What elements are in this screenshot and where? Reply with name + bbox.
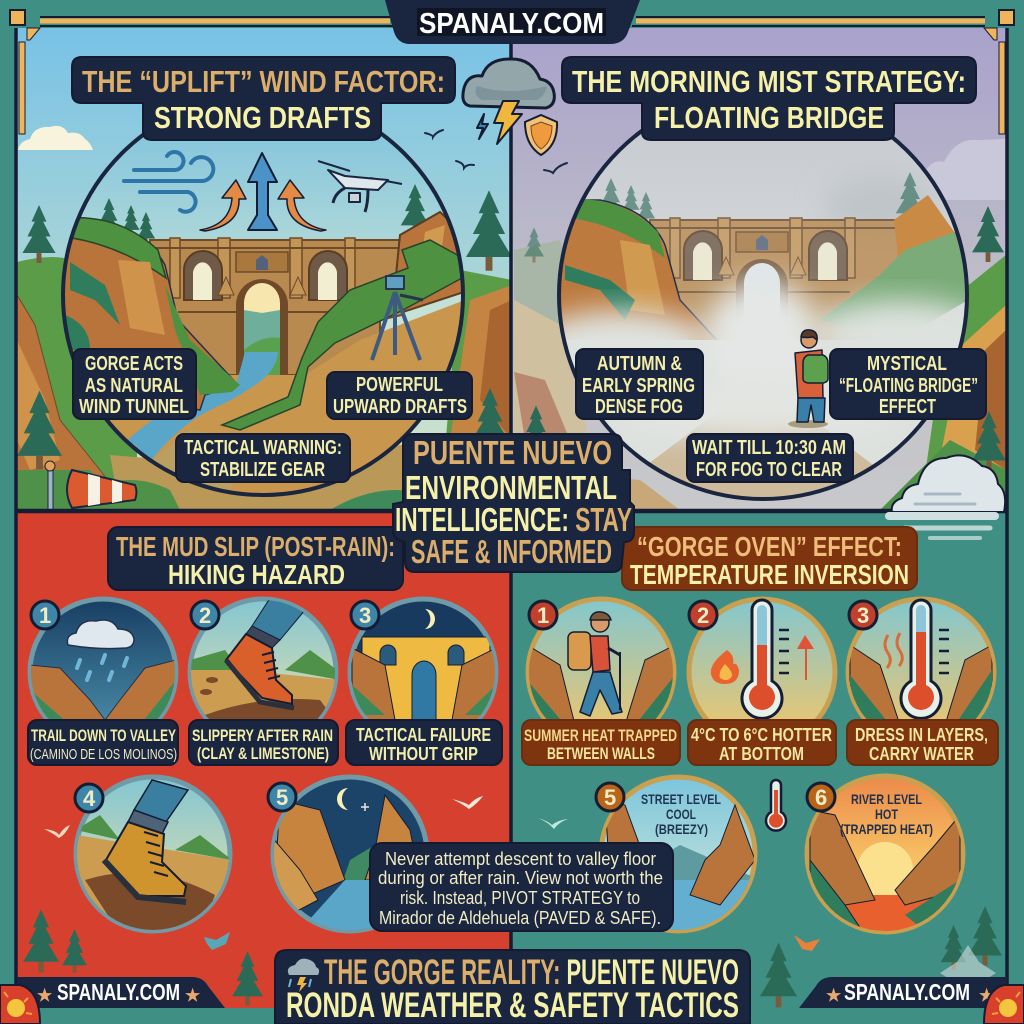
- trees outside circle: [17, 190, 512, 469]
- bottom left badge: site name: ★: [37, 986, 53, 1005]
- central heading: environmental intelligence: PUENTE NUEVO: [413, 434, 612, 471]
- label: wait for fog: WAIT TILL 10:30 AM: [692, 437, 846, 459]
- heading: uplift wind factor: STRONG DRAFTS: [154, 100, 371, 135]
- panel: gorge oven effect: [512, 512, 1006, 1008]
- caption: summer heat: [522, 720, 680, 765]
- panel: uplift wind factor: [18, 28, 510, 509]
- step badges: teal panel: [529, 601, 877, 811]
- icon: small thermometer: [766, 780, 786, 831]
- hills outside circle: [514, 240, 1006, 510]
- icon: sun left corner: [0, 985, 40, 1024]
- caption: trail down to valley: TRAIL DOWN TO VALLEY: [31, 726, 176, 745]
- icon: sun right corner: [984, 985, 1024, 1024]
- bottom right badge: site name: SPANALY.COM: [844, 979, 970, 1005]
- callout: pivot strategy: during or after rain. View not worth the: [378, 868, 663, 888]
- cloud: right sky: [362, 152, 411, 165]
- bottom title bar: THE GORGE REALITY: PUENTE NUEVO: [324, 953, 739, 992]
- icon: storm cloud: [463, 59, 554, 108]
- bottom left badge: site name: [17, 977, 225, 1008]
- caption: tactical failure: TACTICAL FAILURE: [356, 725, 491, 745]
- bird: [544, 163, 567, 173]
- label: gorge wind tunnel: WIND TUNNEL: [79, 396, 189, 418]
- label: autumn fog: EARLY SPRING: [582, 375, 695, 397]
- trees outside circle: [522, 206, 1006, 471]
- label: floating bridge effect: MYSTICAL: [867, 353, 947, 375]
- label: gorge wind tunnel: AS NATURAL: [85, 375, 183, 397]
- icon: small storm cloud: [288, 959, 319, 992]
- label: wait for fog: [687, 434, 853, 482]
- step badges: red panel: 4: [83, 786, 96, 811]
- step badges: teal panel: 3: [857, 603, 869, 628]
- central heading: environmental intelligence: [393, 434, 634, 572]
- caption: tactical failure: WITHOUT GRIP: [369, 744, 478, 764]
- caption: hotter at bottom: [688, 720, 836, 765]
- panel: mud slip hazard: [17, 512, 512, 1008]
- cloud: right haze: [926, 138, 1006, 200]
- heading: mud slip: [108, 527, 403, 590]
- label: tactical warning: TACTICAL WARNING:: [184, 437, 342, 459]
- bottom left badge: site name: SPANALY.COM: [57, 979, 180, 1005]
- big circle scene: fog and bridge: [557, 129, 969, 501]
- callout: pivot strategy: Never attempt descent to valley floor: [385, 849, 656, 869]
- caption: summer heat: BETWEEN WALLS: [547, 744, 655, 763]
- step 3: bridge at night: [348, 596, 498, 719]
- step 5: street level cool: STREET LEVEL: [641, 791, 721, 807]
- big circle scene: gorge and bridge: [61, 132, 465, 497]
- icon: upward arrows: [200, 153, 326, 231]
- label: gorge wind tunnel: GORGE ACTS: [85, 353, 183, 375]
- label: autumn fog: [576, 349, 703, 419]
- step 6: river level hot: (TRAPPED HEAT): [840, 821, 933, 837]
- icon: camera tripod: [372, 276, 423, 360]
- heading: uplift wind factor: [72, 57, 455, 140]
- label: floating bridge effect: EFFECT: [879, 396, 936, 418]
- step 5: street level cool: [601, 777, 760, 935]
- heading: morning mist strategy: FLOATING BRIDGE: [654, 100, 884, 135]
- cloud icon: fog bottom right: [889, 455, 1005, 538]
- step badges: red panel: 5: [276, 785, 288, 810]
- label: powerful drafts: UPWARD DRAFTS: [333, 396, 467, 418]
- callout: pivot strategy: risk. Instead, PIVOT STRATEGY to: [400, 888, 640, 908]
- step 6: river level hot: HOT: [875, 806, 898, 822]
- cloud: left sky: [18, 126, 93, 150]
- central heading: environmental intelligence: SAFE & INFORMED: [411, 533, 612, 570]
- step badges: teal panel: 6: [815, 785, 827, 810]
- bottom title bar: [275, 950, 750, 1024]
- heading: mud slip: HIKING HAZARD: [168, 559, 345, 590]
- hills and cliffs outside circle: [17, 257, 512, 510]
- icon: wind swirls: [124, 152, 213, 212]
- step badges: teal panel: 2: [697, 603, 709, 628]
- bottom right badge: site name: ★: [826, 986, 842, 1005]
- label: powerful drafts: POWERFUL: [356, 374, 443, 396]
- step 4: tan boot in mud: [76, 777, 232, 934]
- label: floating bridge effect: [830, 349, 986, 419]
- callout: pivot strategy: Mirador de Aldehuela (PAVED & SAFE).: [379, 908, 661, 928]
- step 5: street level cool: (BREEZY): [655, 821, 708, 837]
- icon: shield: [525, 115, 557, 155]
- callout: pivot strategy: [370, 843, 673, 931]
- icon: drone: [318, 161, 402, 212]
- step badges: teal panel: 1: [537, 603, 549, 628]
- step 2: thermometer with flame: [689, 599, 835, 745]
- caption: dress in layers: DRESS IN LAYERS,: [855, 725, 988, 745]
- caption: trail down to valley: (CAMINO DE LOS MOLINOS): [30, 746, 177, 763]
- caption: hotter at bottom: AT BOTTOM: [719, 744, 804, 764]
- caption: hotter at bottom: 4°C TO 6°C HOTTER: [691, 725, 832, 745]
- caption: slippery after rain: (CLAY & LIMESTONE): [197, 744, 329, 763]
- label: powerful drafts: [327, 372, 472, 419]
- step badges: teal panel: 5: [604, 785, 616, 810]
- bottom left badge: site name: ★: [185, 986, 201, 1005]
- birds: [425, 130, 474, 168]
- caption: slippery after rain: SLIPPERY AFTER RAIN: [192, 726, 333, 745]
- step 1: rain cloud over valley: [28, 596, 178, 719]
- step badges: red panel: [31, 601, 379, 812]
- step 6: river level hot: RIVER LEVEL: [851, 791, 922, 807]
- step badges: red panel: 1: [39, 603, 51, 628]
- icon: hiker with green backpack: [788, 330, 828, 428]
- label: gorge wind tunnel: [73, 349, 196, 419]
- label: autumn fog: AUTUMN &: [597, 353, 682, 375]
- central heading: environmental intelligence: INTELLIGENCE: STAY: [395, 501, 632, 538]
- heading: gorge oven: “GORGE OVEN” EFFECT:: [637, 531, 902, 562]
- central heading: environmental intelligence: ENVIRONMENTAL: [405, 469, 617, 506]
- label: tactical warning: [176, 434, 350, 482]
- top badge: site name: [385, 0, 640, 44]
- step badges: red panel: 2: [199, 603, 211, 628]
- step 1: hiker: [526, 596, 676, 719]
- bottom right badge: site name: [799, 977, 1007, 1008]
- icon: windsock: [35, 461, 136, 562]
- icon: lightning bolts: [477, 101, 522, 144]
- step 2: orange boot in mud: [188, 596, 338, 719]
- caption: trail down to valley: [28, 720, 178, 765]
- label: autumn fog: DENSE FOG: [595, 396, 683, 418]
- caption: summer heat: SUMMER HEAT TRAPPED: [524, 726, 677, 745]
- heading: uplift wind factor: THE “UPLIFT” WIND FACTOR:: [82, 64, 445, 99]
- label: tactical warning: STABILIZE GEAR: [200, 459, 325, 481]
- step badges: red panel: 3: [359, 603, 371, 628]
- step 6: river level hot: [807, 776, 963, 935]
- top badge: site name: SPANALY.COM: [419, 8, 604, 40]
- label: wait for fog: FOR FOG TO CLEAR: [696, 459, 842, 481]
- caption: dress in layers: [847, 720, 998, 765]
- step 5: street level cool: COOL: [666, 806, 696, 822]
- heading: morning mist strategy: [562, 57, 976, 140]
- decorative birds and trees: [23, 796, 1002, 1007]
- caption: dress in layers: CARRY WATER: [869, 744, 974, 764]
- caption: slippery after rain: [189, 720, 338, 765]
- heading: gorge oven: [622, 527, 917, 590]
- caption: tactical failure: [346, 720, 502, 765]
- bottom right badge: site name: ★: [979, 986, 995, 1005]
- heading: gorge oven: TEMPERATURE INVERSION: [630, 559, 909, 590]
- step 3: thermometer with heat waves: [846, 596, 996, 719]
- heading: mud slip: THE MUD SLIP (POST-RAIN):: [116, 531, 395, 562]
- step 5: gorge at night: [270, 777, 427, 931]
- bottom title bar: RONDA WEATHER & SAFETY TACTICS: [286, 986, 739, 1024]
